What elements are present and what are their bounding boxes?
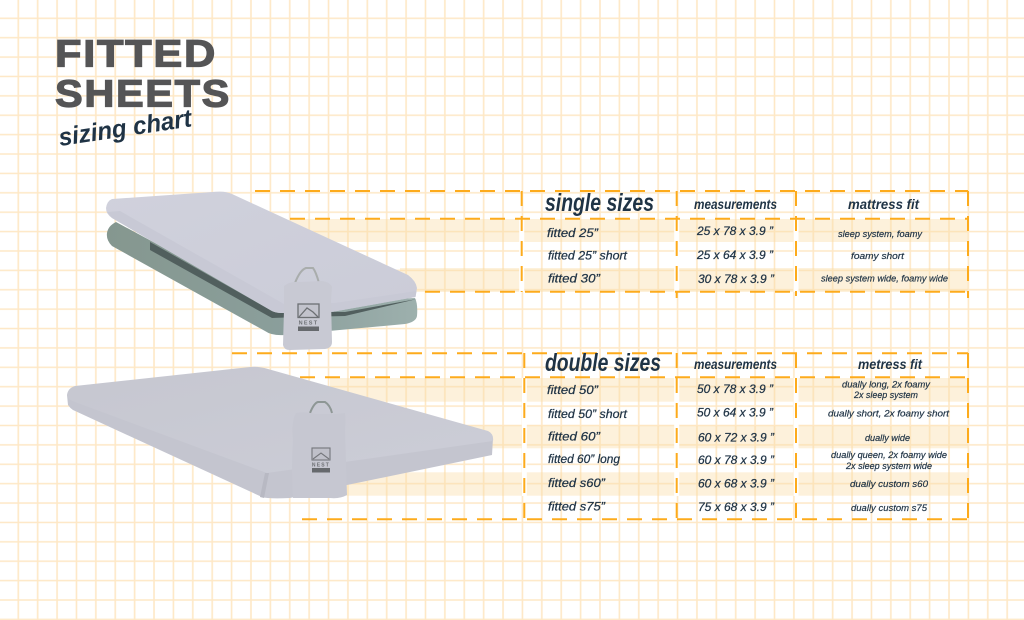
row: fitted 25 short: foamy short [851,251,904,262]
row: fitted s60: 60 x 68 x 3.9 ” [698,476,775,490]
row: fitted 30: 30 x 78 x 3.9 ” [698,272,775,286]
row: fitted 25 short: 25 x 64 x 3.9 ” [696,248,774,262]
heading: double sizes: double sizes [545,349,661,377]
column header: measurements: measurements [694,356,777,372]
row: fitted s75: dually custom s75 [851,503,928,514]
row: fitted s75: 75 x 68 x 3.9 ” [698,500,775,514]
column header: metress fit: metress fit [858,356,923,372]
row: fitted s60: dually custom s60 [850,479,929,490]
row: fitted 30: fitted 30” [548,272,601,286]
row: fitted 25: 25 x 78 x 3.9 ” [696,224,774,238]
row: fitted 60 long: dually queen, 2x foamy wide [831,450,947,461]
pack bag: NEST [299,320,318,326]
row: fitted 60: fitted 60” [548,430,601,444]
dark gap between sheet and pad [150,242,417,318]
row: fitted 50: 2x sleep system [853,390,918,401]
sheet side [67,395,493,498]
row: fitted 60 long: 2x sleep system wide [845,461,932,472]
row: fitted 60: 60 x 72 x 3.9 ” [698,430,775,444]
image: single mattress with fitted sheet [106,192,417,350]
title: SHEETS [55,74,231,116]
row: fitted 25: sleep system, foamy [838,229,923,240]
row: fitted 50 short: 50 x 64 x 3.9 ” [697,406,774,420]
highlight bands: single sizes [290,219,968,292]
panel: double sizes table [232,349,968,522]
row: fitted 60 long [548,450,947,472]
row: fitted 50 short: fitted 50” short [548,407,628,421]
title [55,34,231,116]
row: fitted 25 short: fitted 25” short [548,248,628,262]
row: fitted 60: dually wide [865,433,910,444]
row: fitted s60: fitted s60” [548,476,606,490]
row: fitted 50: 50 x 78 x 3.9 ” [697,382,774,396]
pack bag [283,268,332,350]
row: fitted 25 short [548,248,904,262]
row: fitted 50 short [548,406,949,421]
title: FITTED [55,34,217,76]
pack bag [292,402,347,498]
row: fitted 50 [547,380,931,401]
row: fitted 50 short: dually short, 2x foamy short [828,408,949,420]
pack bag: NEST [312,462,330,468]
image: double mattress with fitted sheet [67,367,493,498]
panel: single sizes table [255,189,968,298]
row: fitted 60 long: fitted 60” long [548,452,620,466]
column header: mattress fit: mattress fit [848,196,920,212]
dashed table frame: single sizes [255,191,968,298]
row: fitted 25 [547,224,923,240]
row: fitted s75 [548,500,928,514]
sheet corner seam [260,473,269,498]
fitted sheet [106,192,417,313]
green air pad [107,222,417,335]
sheet side shading [107,211,416,313]
row: fitted 25: fitted 25” [547,226,599,240]
column header: measurements: measurements [694,196,777,212]
sheet top [67,367,493,473]
row: fitted 60 [548,430,910,444]
row: fitted s75: fitted s75” [548,500,606,514]
row: fitted 60 long: 60 x 78 x 3.9 ” [698,453,775,467]
row: fitted 50: fitted 50” [547,383,599,397]
row: fitted 30 [548,272,948,286]
subtitle: sizing chart: sizing chart [57,104,195,152]
row: fitted 30: sleep system wide, foamy wide [821,274,948,284]
highlight bands: double sizes [330,378,968,496]
row: fitted 50: dually long, 2x foamy [842,380,931,390]
row: fitted s60 [548,476,929,490]
heading: single sizes: single sizes [545,189,654,217]
dashed table frame: double sizes [232,353,968,522]
